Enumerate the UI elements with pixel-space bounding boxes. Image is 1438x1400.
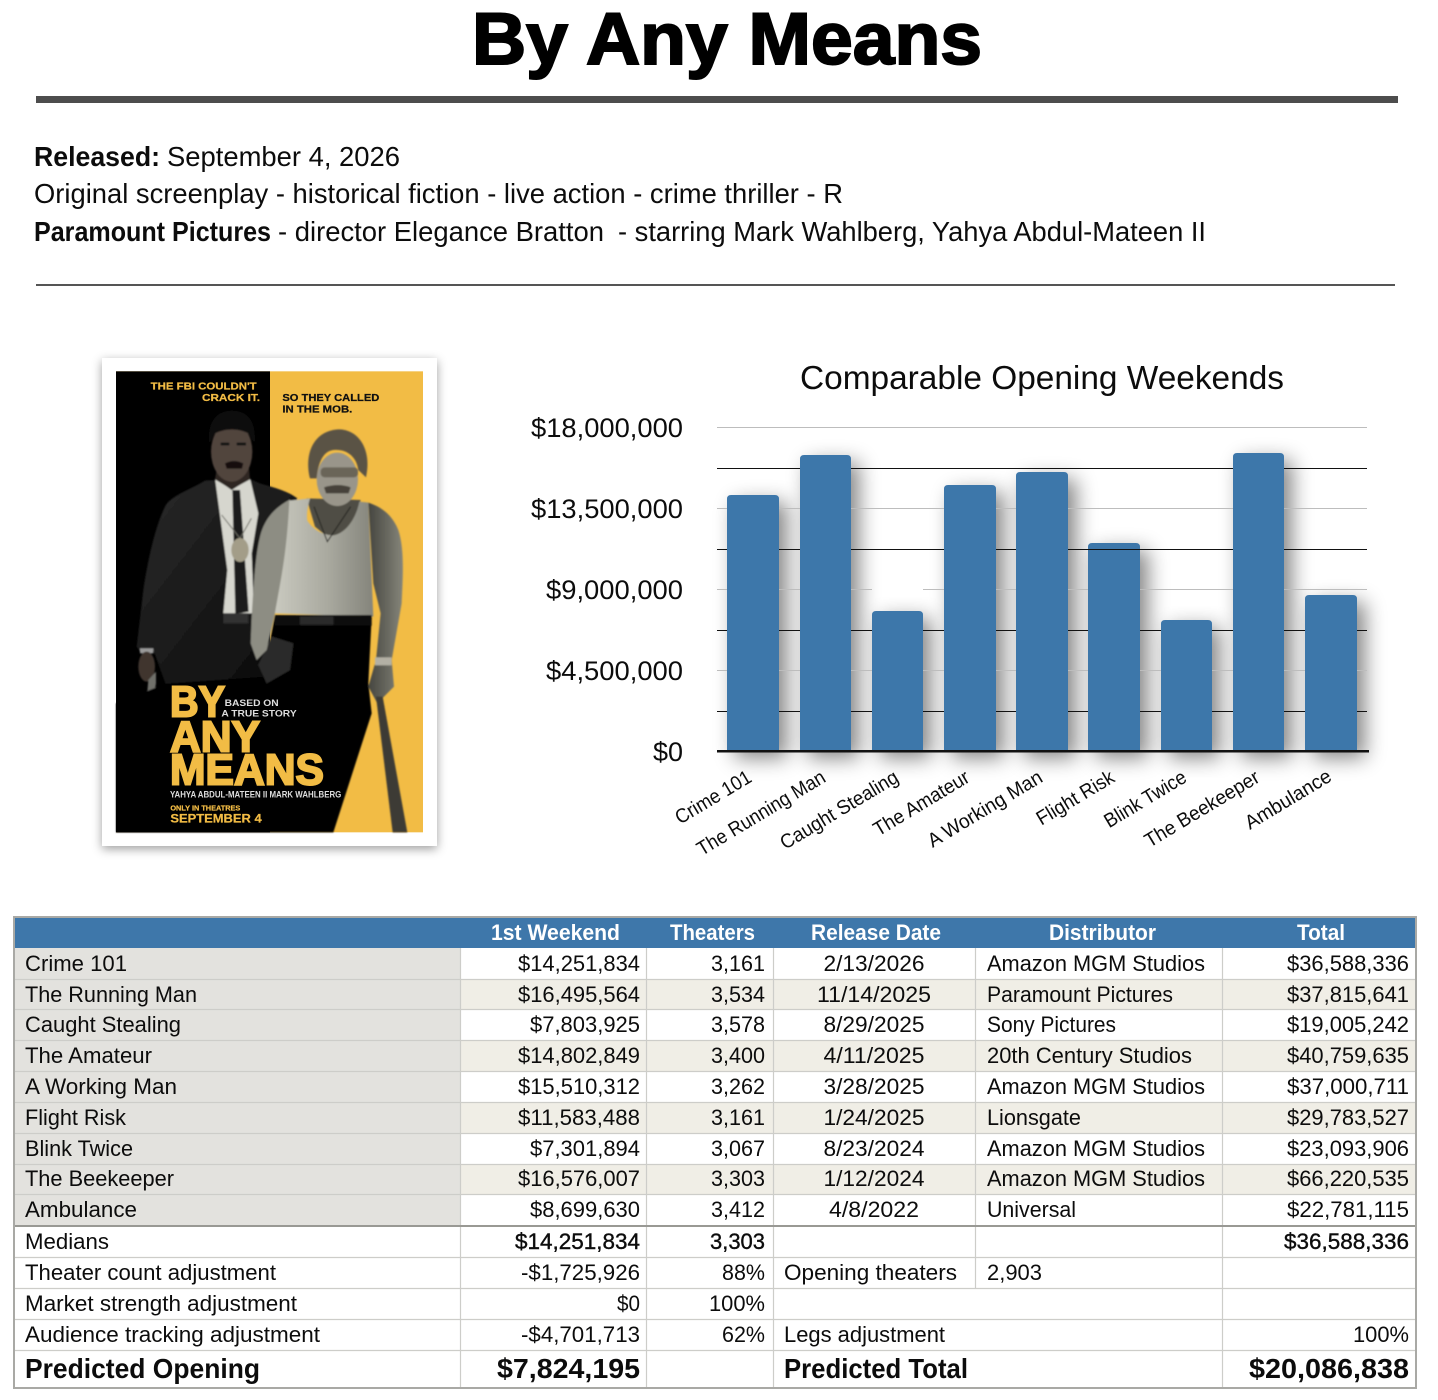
row: Ambulance: Universal xyxy=(987,1197,1076,1222)
x-axis labels: Caught Stealing xyxy=(776,766,903,854)
row: Caught Stealing: 3,578 xyxy=(711,1012,765,1037)
row: predictions: Predicted Opening xyxy=(25,1353,260,1384)
row: predictions: $20,086,838 xyxy=(1249,1353,1409,1384)
panel: comparables table xyxy=(14,917,1416,1388)
row: Crime 101: $36,588,336 xyxy=(1287,951,1409,976)
poster title: BASED ON xyxy=(225,698,279,708)
row: Crime 101: Crime 101 xyxy=(25,951,127,976)
row: A Working Man: 3,262 xyxy=(711,1074,765,1099)
row: Crime 101 xyxy=(25,951,1409,976)
row: predictions: $7,824,195 xyxy=(497,1353,640,1384)
x-axis labels: Flight Risk xyxy=(1033,766,1119,830)
row: A Working Man: A Working Man xyxy=(25,1074,177,1099)
genre line: Original screenplay - historical fiction - live action - crime thriller - R xyxy=(34,178,843,209)
row: audience tracking adjustment xyxy=(25,1322,1409,1347)
x-axis labels: Crime 101 xyxy=(671,766,756,829)
poster title: SEPTEMBER 4 xyxy=(170,811,262,825)
release label: Released: xyxy=(34,141,160,172)
x-axis labels: Ambulance xyxy=(1241,765,1336,834)
row: Flight Risk: Flight Risk xyxy=(25,1105,127,1130)
row: audience tracking adjustment: 62% xyxy=(722,1322,765,1347)
row: theater count adjustment: -$1,725,926 xyxy=(521,1260,640,1285)
row: audience tracking adjustment: 100% xyxy=(1353,1322,1409,1347)
row: market strength adjustment: 100% xyxy=(709,1291,765,1316)
row: medians xyxy=(25,1229,1409,1254)
row: theater count adjustment xyxy=(25,1260,1042,1285)
title: By Any Means xyxy=(472,0,982,80)
row: The Running Man: $37,815,641 xyxy=(1287,982,1409,1007)
row: Ambulance: 4/8/2022 xyxy=(829,1197,919,1222)
poster title: BY xyxy=(170,679,225,727)
row: The Running Man: 3,534 xyxy=(711,982,765,1007)
row: Blink Twice: Blink Twice xyxy=(25,1136,133,1161)
row: Caught Stealing: $19,005,242 xyxy=(1287,1012,1409,1037)
row: Crime 101: Amazon MGM Studios xyxy=(987,951,1205,976)
table header: Theaters xyxy=(670,920,755,945)
row: medians: $14,251,834 xyxy=(515,1229,640,1254)
row: medians: Medians xyxy=(25,1229,109,1254)
row: The Beekeeper: The Beekeeper xyxy=(25,1166,174,1191)
row: The Running Man: 11/14/2025 xyxy=(817,982,931,1007)
row: Crime 101: 2/13/2026 xyxy=(824,951,924,976)
release date: September 4, 2026 xyxy=(167,141,400,172)
row: Ambulance: Ambulance xyxy=(25,1197,137,1222)
poster taglines: THE FBI COULDN'T xyxy=(151,381,257,392)
row: Flight Risk: $29,783,527 xyxy=(1287,1105,1409,1130)
poster title: MEANS xyxy=(170,747,324,795)
row: Blink Twice: 3,067 xyxy=(711,1136,765,1161)
row: market strength adjustment xyxy=(25,1291,765,1316)
row: The Amateur: 3,400 xyxy=(711,1043,765,1068)
y-axis labels xyxy=(531,413,683,767)
row: The Beekeeper: $16,576,007 xyxy=(518,1166,640,1191)
row: The Running Man: Paramount Pictures xyxy=(987,982,1173,1007)
row: theater count adjustment: 88% xyxy=(722,1260,765,1285)
panel: movie poster xyxy=(102,358,437,846)
studio: Paramount Pictures xyxy=(34,216,271,247)
row: The Running Man xyxy=(25,982,1409,1007)
x-axis labels xyxy=(671,765,1336,860)
row: Flight Risk: $11,583,488 xyxy=(518,1105,640,1130)
poster art xyxy=(116,371,423,832)
row: Flight Risk: 3,161 xyxy=(711,1105,765,1130)
row: Caught Stealing: Caught Stealing xyxy=(25,1012,181,1037)
row: medians: 3,303 xyxy=(710,1229,765,1254)
row: The Amateur: The Amateur xyxy=(25,1043,152,1068)
y-axis labels: $0 xyxy=(653,737,683,767)
table header: Release Date xyxy=(811,920,941,945)
row: predictions: Predicted Total xyxy=(784,1353,968,1384)
x-axis labels: The Beekeeper xyxy=(1141,766,1264,852)
row: A Working Man xyxy=(25,1074,1409,1099)
row: Caught Stealing: $7,803,925 xyxy=(530,1012,640,1037)
row: Caught Stealing xyxy=(25,1012,1409,1037)
row: market strength adjustment: $0 xyxy=(617,1291,640,1316)
y-axis labels: $13,500,000 xyxy=(531,494,683,524)
row: A Working Man: $15,510,312 xyxy=(518,1074,640,1099)
details rule xyxy=(36,284,1395,286)
row: Crime 101: $14,251,834 xyxy=(518,951,640,976)
row: The Beekeeper: 1/12/2024 xyxy=(824,1166,924,1191)
poster taglines: SO THEY CALLED xyxy=(282,393,379,404)
row: The Beekeeper: 3,303 xyxy=(711,1166,765,1191)
row: Caught Stealing: 8/29/2025 xyxy=(824,1012,924,1037)
row: Ambulance: $8,699,630 xyxy=(530,1197,640,1222)
row: Flight Risk xyxy=(25,1105,1409,1130)
poster taglines: IN THE MOB. xyxy=(282,404,353,415)
row: medians: $36,588,336 xyxy=(1284,1229,1409,1254)
row: theater count adjustment: Opening theaters xyxy=(784,1260,957,1285)
title rule xyxy=(36,96,1398,103)
row: Blink Twice: Amazon MGM Studios xyxy=(987,1136,1205,1161)
row: The Amateur: 20th Century Studios xyxy=(987,1043,1192,1068)
film details xyxy=(34,141,1206,247)
table header: Distributor xyxy=(1049,920,1156,945)
row: The Amateur: $40,759,635 xyxy=(1287,1043,1409,1068)
y-axis labels: $4,500,000 xyxy=(546,656,683,686)
x-axis labels: A Working Man xyxy=(924,766,1047,852)
table header: 1st Weekend xyxy=(491,920,620,945)
row: The Amateur xyxy=(25,1043,1409,1068)
poster taglines: CRACK IT. xyxy=(202,393,260,404)
y-axis labels: $18,000,000 xyxy=(531,413,683,443)
row: The Amateur: 4/11/2025 xyxy=(824,1043,924,1068)
x-axis labels: Blink Twice xyxy=(1100,766,1191,833)
row: Ambulance xyxy=(25,1197,1409,1222)
row: Blink Twice xyxy=(25,1136,1409,1161)
row: Blink Twice: $7,301,894 xyxy=(530,1136,640,1161)
row: The Beekeeper xyxy=(25,1166,1409,1191)
figure: mobster xyxy=(116,429,407,832)
x-axis labels: The Running Man xyxy=(693,766,830,860)
table header: Total xyxy=(1297,920,1345,945)
poster title: ONLY IN THEATRES xyxy=(170,804,240,813)
row: A Working Man: Amazon MGM Studios xyxy=(987,1074,1205,1099)
chart title: Comparable Opening Weekends xyxy=(800,359,1284,396)
row: The Beekeeper: $66,220,535 xyxy=(1287,1166,1409,1191)
y-axis labels: $9,000,000 xyxy=(546,575,683,605)
bars xyxy=(727,453,1357,751)
row: A Working Man: 3/28/2025 xyxy=(824,1074,924,1099)
row: theater count adjustment: Theater count adjustment xyxy=(25,1260,276,1285)
row: Flight Risk: 1/24/2025 xyxy=(824,1105,924,1130)
row: market strength adjustment: Market strength adjustment xyxy=(25,1291,297,1316)
poster taglines xyxy=(151,381,379,415)
table header xyxy=(14,917,1416,948)
row: Blink Twice: $23,093,906 xyxy=(1287,1136,1409,1161)
director: - director Elegance Bratton xyxy=(278,216,604,247)
poster title xyxy=(170,679,341,825)
row: audience tracking adjustment: Legs adjustment xyxy=(784,1322,945,1347)
row: The Running Man: The Running Man xyxy=(25,982,197,1007)
row: predictions xyxy=(25,1353,1409,1384)
figure: agent xyxy=(137,411,297,727)
row: audience tracking adjustment: Audience tracking adjustment xyxy=(25,1322,320,1347)
row: audience tracking adjustment: -$4,701,713 xyxy=(521,1322,640,1347)
row: Ambulance: 3,412 xyxy=(711,1197,765,1222)
poster title: ANY xyxy=(170,713,260,761)
row: Flight Risk: Lionsgate xyxy=(987,1105,1081,1130)
row: Ambulance: $22,781,115 xyxy=(1287,1197,1409,1222)
panel: bar chart xyxy=(531,359,1369,860)
row: The Running Man: $16,495,564 xyxy=(518,982,640,1007)
poster title: A TRUE STORY xyxy=(221,708,298,718)
row: Caught Stealing: Sony Pictures xyxy=(987,1012,1116,1037)
row: The Amateur: $14,802,849 xyxy=(518,1043,640,1068)
row: A Working Man: $37,000,711 xyxy=(1287,1074,1409,1099)
poster title: YAHYA ABDUL-MATEEN II MARK WAHLBERG xyxy=(170,790,341,800)
row: theater count adjustment: 2,903 xyxy=(987,1260,1042,1285)
stars: - starring Mark Wahlberg, Yahya Abdul-Mateen II xyxy=(618,216,1206,247)
x-axis labels: The Amateur xyxy=(870,766,974,841)
row: Crime 101: 3,161 xyxy=(711,951,765,976)
row: Blink Twice: 8/23/2024 xyxy=(824,1136,924,1161)
row: The Beekeeper: Amazon MGM Studios xyxy=(987,1166,1205,1191)
